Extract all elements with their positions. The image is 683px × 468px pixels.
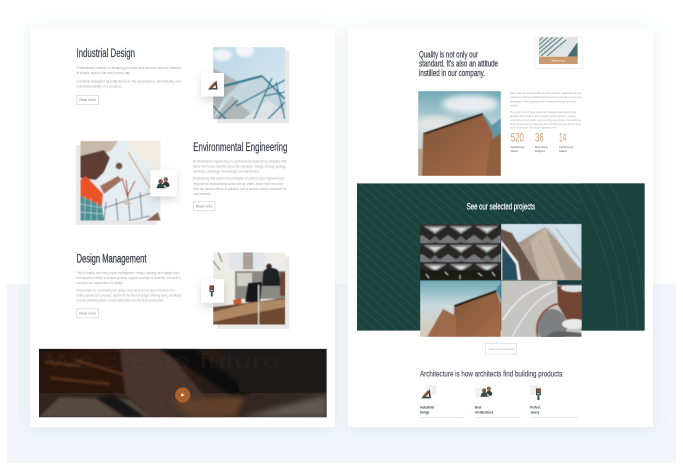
stat: 36: Designers xyxy=(535,149,545,153)
stat: 14: Conference xyxy=(559,145,573,149)
heading: Industrial Design: Industrial Design xyxy=(76,48,135,60)
panel: selected projects xyxy=(357,183,645,343)
photo: engineer at plans xyxy=(76,141,161,225)
text block: Environmental Engineering description: Environmental engineering is a professional engineering discipline that xyxy=(193,160,286,164)
text block: Design Management description: Responsible for coordinating the design work and puts the team involved in the xyxy=(76,288,176,292)
panel: services page xyxy=(30,27,335,427)
text block: about description: hours of life for people. That's what all businesses do here. xyxy=(510,126,556,130)
text block: Industrial Design description: of people around the world every day. xyxy=(76,71,130,75)
text block: Environmental Engineering description: from the harmful effects of pollution, and to provide healthy resources for xyxy=(193,187,287,191)
button: read more xyxy=(77,309,98,318)
text block: Environmental Engineering description: hydraulics, hydrology, microbiology, and mathematics. xyxy=(193,169,260,173)
button: read more xyxy=(77,96,98,105)
text block: Environmental Engineering description: takes from broad scientific topics like chemistry, biology, ecology, geology, xyxy=(193,164,286,168)
feature: industrial design: Industrial xyxy=(420,405,434,409)
heading: quality statement: standard. It's also an attitude xyxy=(419,58,498,69)
card: view more xyxy=(535,37,582,68)
stat: 14 xyxy=(559,131,573,153)
feature: perfect joinery: Joinery xyxy=(530,411,540,415)
stat: 520: Architecture xyxy=(511,145,525,149)
video banner: We create future xyxy=(47,351,280,373)
stat: 36 xyxy=(535,131,548,153)
photo: triangular ceiling xyxy=(420,224,501,280)
heading: Design Management: Design Management xyxy=(76,253,147,265)
text block: Industrial Design description: Professional practice of designing products and services used by millions xyxy=(76,66,181,70)
stat: 14: 14 xyxy=(559,131,566,145)
text block: about description: Over and in one of those years and/or designers all experts Some xyxy=(510,110,577,114)
feature: perfect joinery: Perfect xyxy=(530,405,541,409)
feature: best architectures: Architectures xyxy=(475,411,493,415)
section: Industrial Design xyxy=(76,43,289,123)
text block: about description: entertainment destinations, and something around town. It's an absolute xyxy=(510,118,582,122)
text block: Industrial Design description: Industrial designers typically focus on the appearance, functionality and xyxy=(76,80,180,84)
text block: about description: world. xyxy=(510,104,518,108)
icon: play button xyxy=(175,387,190,403)
button: view more projects: View more projects xyxy=(488,347,514,351)
text block: Environmental Engineering description: Engineering that applies the principles of science and engineering to xyxy=(193,177,285,181)
icon: tool xyxy=(536,388,541,400)
stat: 36: Best Interior xyxy=(535,145,548,149)
icon: people xyxy=(480,387,492,397)
photo: glass facade xyxy=(212,43,289,123)
button: read more: Read more xyxy=(196,204,213,208)
section: Design Management xyxy=(76,252,289,329)
text block: about description: experiences that the industrial and built world can provide our everyday xyxy=(510,95,582,99)
text block: Environmental Engineering description: use/animals. xyxy=(193,192,211,196)
stat: 520: 520 xyxy=(511,131,524,145)
text block: Design Management description: techniques to control a creative process, support a culture of creativity, and build a xyxy=(76,276,181,280)
stats row xyxy=(511,131,573,153)
photo: rust building against sky xyxy=(420,280,501,337)
feature: perfect joinery xyxy=(530,385,578,418)
text block: about description: life-spaces, living, working, and thinking as they are our home xyxy=(510,100,577,104)
button: read more xyxy=(194,202,215,211)
icon: tool card xyxy=(201,279,224,303)
feature: industrial design: Design xyxy=(420,411,430,415)
text block: Design Management description xyxy=(76,271,182,302)
text block: Environmental Engineering description: improve the environmental factors like air, water, and/or land resources xyxy=(193,182,284,186)
heading: quality statement xyxy=(419,48,498,78)
stat: 520 xyxy=(511,131,525,153)
background band xyxy=(7,284,676,463)
heading: Environmental Engineering: Environmental Engineering xyxy=(193,142,287,154)
button: read more: Read more xyxy=(79,311,96,315)
text block: Design Management description: Field of inquiry that uses project management, design, strategy, and supply chain xyxy=(76,271,180,275)
card: view more: View more xyxy=(551,58,566,62)
text block: Design Management description: and the planning phase, to the drafts team and the final construction. xyxy=(76,298,165,302)
icon: ruler xyxy=(421,389,431,398)
heading: architecture: Architecture is how architects find building products. xyxy=(420,368,564,378)
heading: quality statement: Quality is not only our xyxy=(419,48,478,59)
text block: about description: already offices lead to and evaluate various spaces, venues, xyxy=(510,114,576,118)
icon: people card xyxy=(150,170,177,196)
text block: about description: Every day, we use incredible products and the imaginative design xyxy=(510,91,582,95)
stat: 520: Awards xyxy=(511,149,518,153)
text block: Design Management description: structure and organization for design. xyxy=(76,281,124,285)
photo: rust facade xyxy=(413,91,501,176)
text block: Industrial Design description xyxy=(76,66,181,88)
photo: spiral stairs xyxy=(501,280,582,337)
stat: 14: Awards xyxy=(559,149,567,153)
feature: best architectures: Best xyxy=(475,405,482,409)
heading: quality statement: instilled in our company. xyxy=(419,67,485,78)
feature: best architectures xyxy=(475,387,520,418)
feature: industrial design xyxy=(420,385,463,418)
stat: 36: 36 xyxy=(535,131,544,145)
section: Environmental Engineering xyxy=(76,141,287,225)
video banner xyxy=(39,349,327,417)
heading: selected projects: See our selected projects xyxy=(467,201,535,211)
text block: Industrial Design description: manufacturability of a product. xyxy=(76,84,122,88)
text block: Environmental Engineering description xyxy=(193,160,287,196)
text block: Design Management description: entire construction process, right from the brief of design thinking team, architects xyxy=(76,293,182,297)
panel: about page xyxy=(348,27,653,427)
text block: about description xyxy=(510,91,582,130)
button: view more projects xyxy=(486,344,517,354)
button: read more: Read more xyxy=(79,98,96,102)
photo: tower corner xyxy=(501,224,582,280)
text block: about description: sense of company as it does from any important it is good and, for many xyxy=(510,122,582,126)
icon: ruler card xyxy=(201,73,224,96)
photo: studio office xyxy=(213,252,289,329)
